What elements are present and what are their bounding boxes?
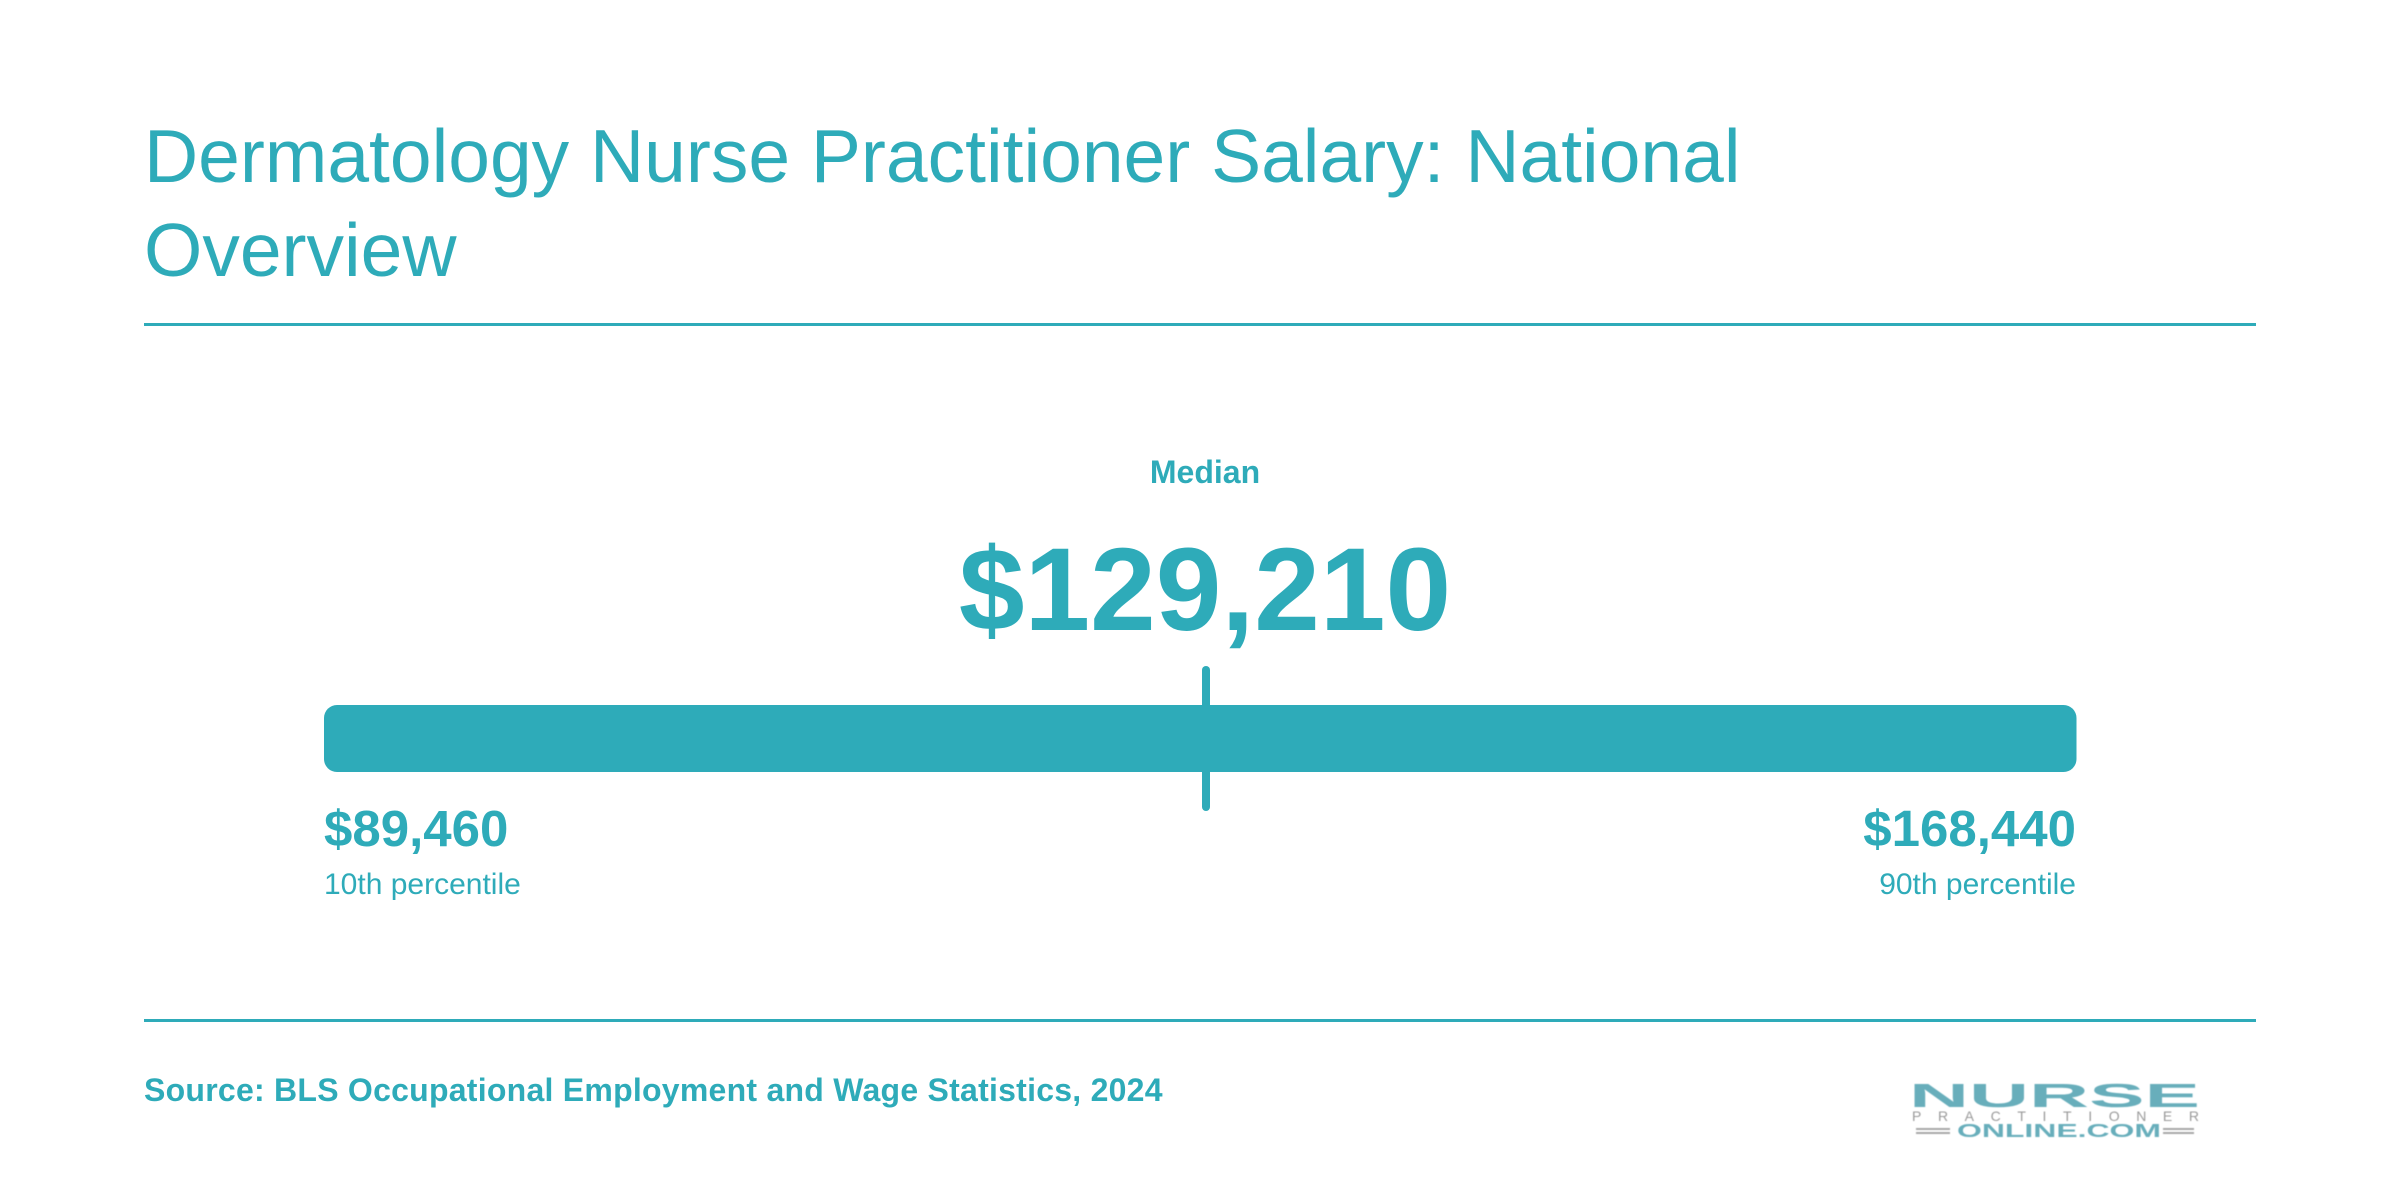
high value: 90th percentile (1863, 800, 2076, 901)
logo: Nurse Practitioner Online: PRACTITIONER (1912, 1108, 2199, 1124)
median value: $129,210 (959, 524, 1451, 656)
median label: Median (1150, 454, 1260, 490)
low value: 10th percentile: $89,460 (324, 800, 508, 857)
title: Overview (144, 208, 457, 292)
source note: Source: BLS Occupational Employment and Wage Statistics, 2024 (144, 1072, 1163, 1108)
logo: Nurse Practitioner Online: ONLINE.COM (1957, 1121, 2161, 1141)
title (144, 114, 1740, 292)
high value: 90th percentile: 90th percentile (1879, 868, 2076, 901)
title: Dermatology Nurse Practitioner Salary: National (144, 114, 1740, 198)
range bar (324, 705, 2076, 772)
salary range chart (324, 666, 2076, 811)
logo: Nurse Practitioner Online (1909, 1077, 2200, 1141)
median marker (1202, 666, 1210, 811)
high value: 90th percentile: $168,440 (1863, 800, 2076, 857)
low value: 10th percentile: 10th percentile (324, 868, 521, 901)
low value: 10th percentile (324, 800, 521, 901)
logo: Nurse Practitioner Online: NURSE (1909, 1077, 2200, 1114)
